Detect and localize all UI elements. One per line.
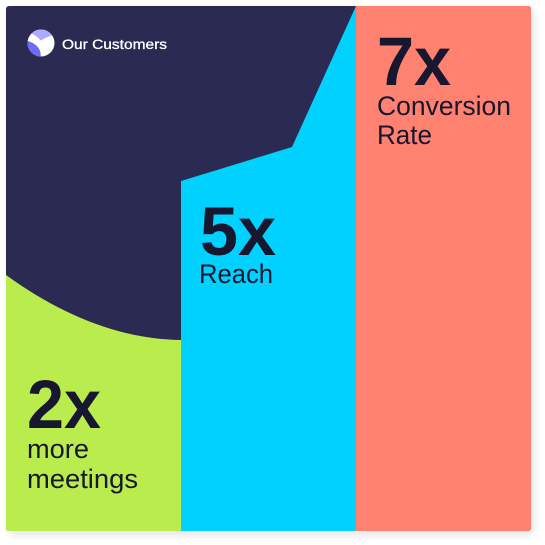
- logo: [27, 30, 54, 56]
- stat: 5x reach: 5x: [200, 193, 276, 270]
- panel: coral column: [356, 6, 531, 531]
- panel: green column: [6, 275, 181, 531]
- heading: our customers: Our Customers: [62, 37, 167, 52]
- stat: 2x more meetings: [27, 366, 138, 494]
- stat: 2x more meetings: 2x: [27, 366, 101, 443]
- stat: 7x conversion rate: [377, 23, 511, 150]
- stat: 7x conversion rate: Rate: [377, 120, 432, 150]
- stat: 7x conversion rate: 7x: [377, 23, 451, 100]
- stat: 5x reach: Reach: [199, 259, 273, 289]
- stat: 2x more meetings: more: [27, 434, 89, 464]
- stat: 7x conversion rate: Conversion: [377, 91, 511, 121]
- stat: 2x more meetings: meetings: [27, 464, 138, 494]
- panel: cyan column: [181, 6, 356, 531]
